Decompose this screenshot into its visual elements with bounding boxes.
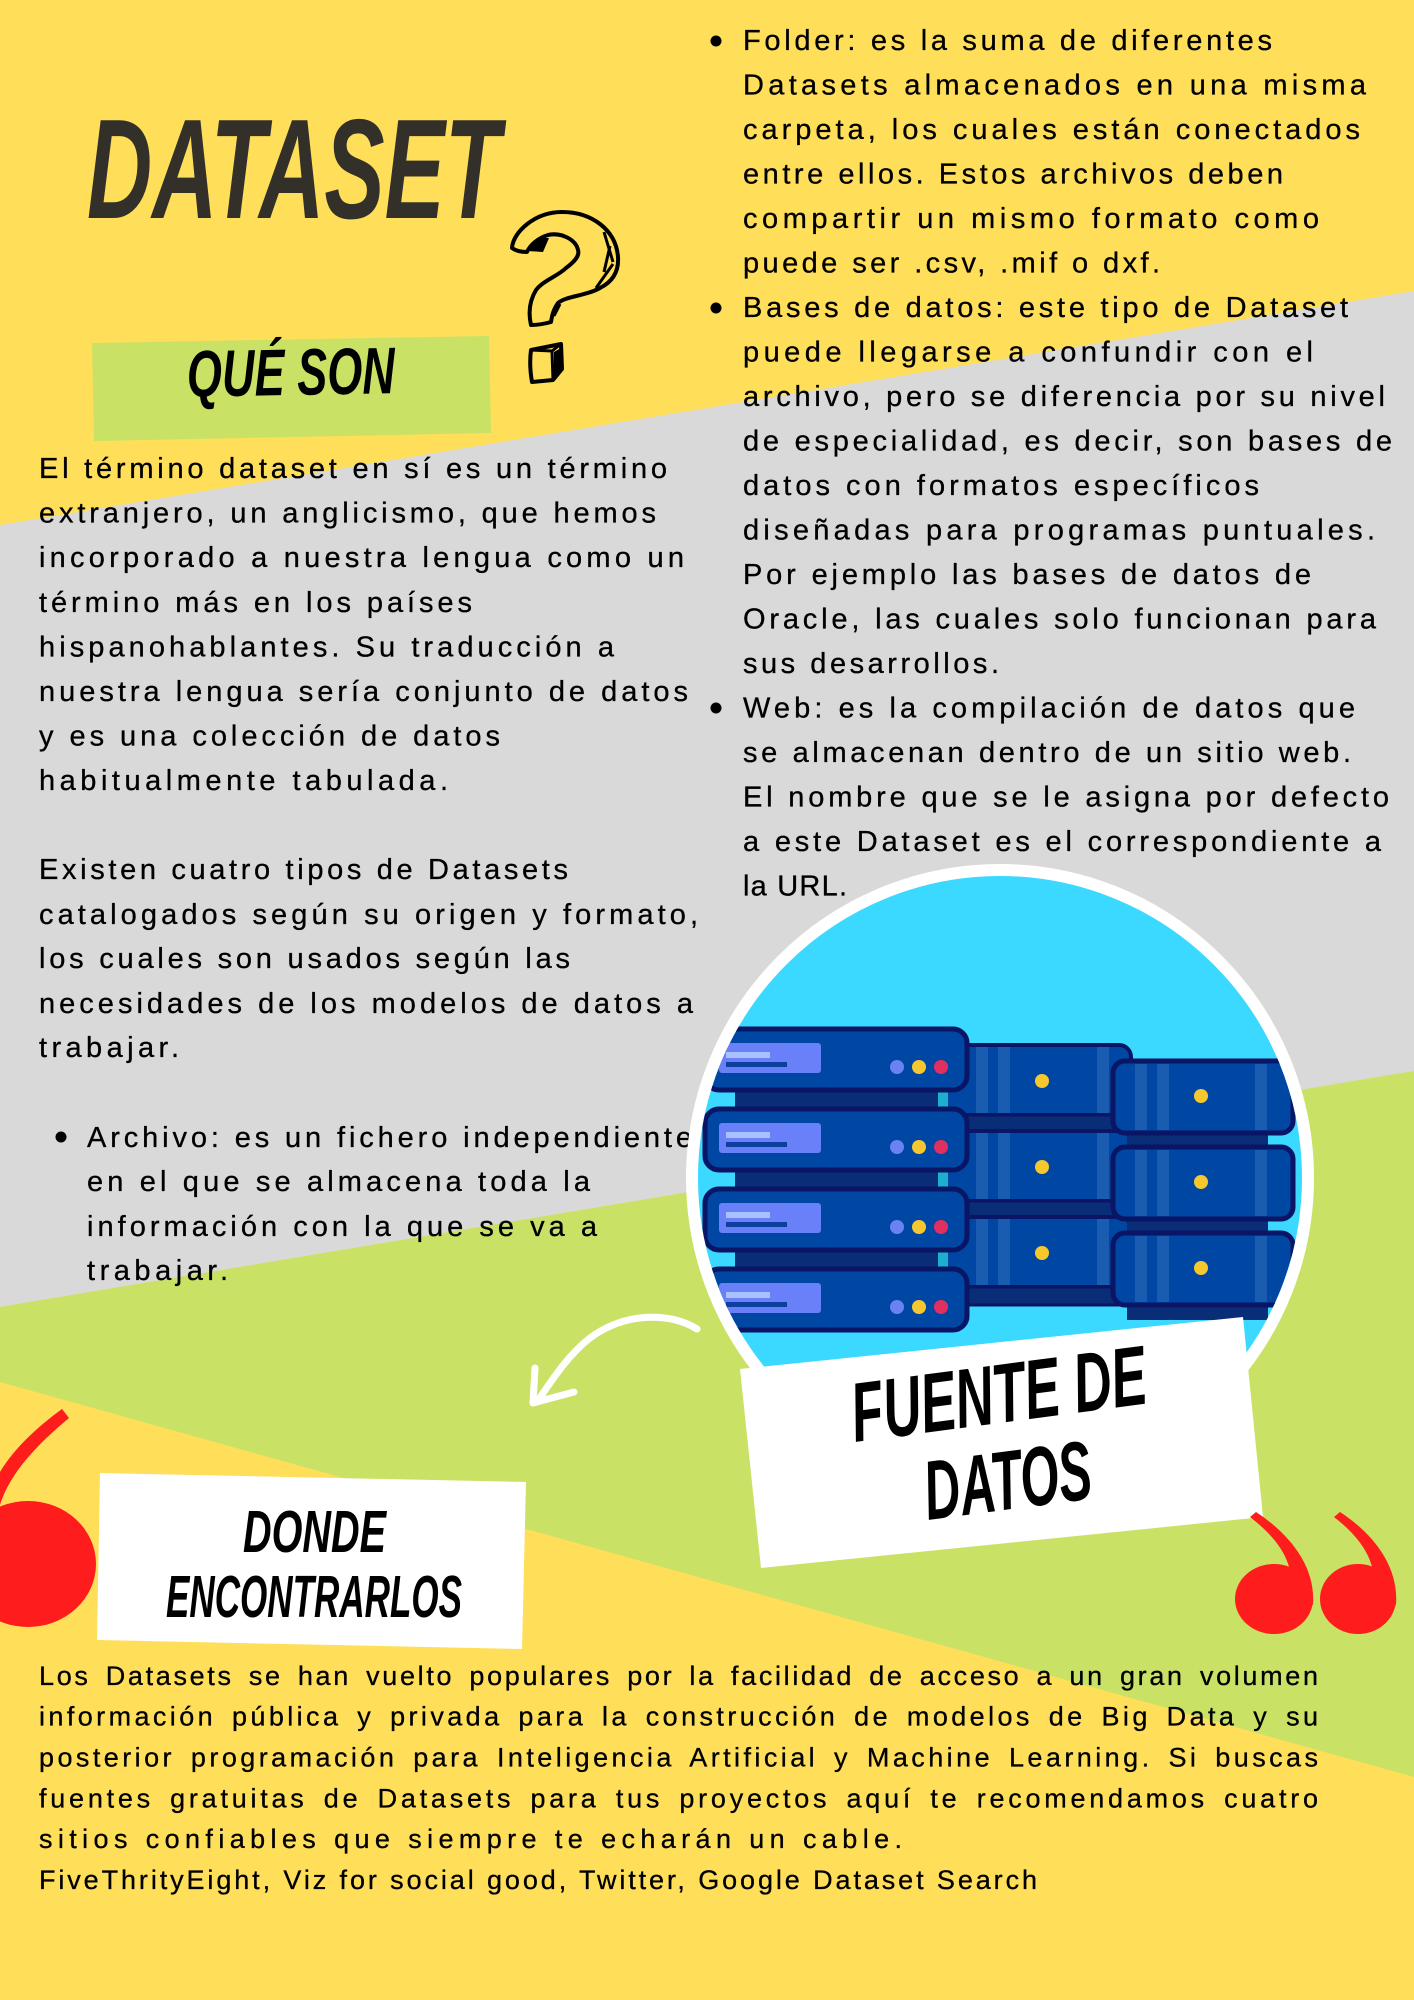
text block: definition: y es una colección de datos — [39, 721, 500, 753]
heading: qué son: QUÉ SON — [186, 333, 396, 411]
bullet: archivo: en el que se almacena toda la — [87, 1166, 591, 1198]
text block: definition: nuestra lengua sería conjunto de datos — [39, 676, 688, 708]
background band: gray — [0, 291, 1414, 1307]
text block: definition: habitualmente tabulada. — [39, 765, 448, 797]
text block: types intro: necesidades de los modelos de datos a — [39, 988, 694, 1020]
bullet: bases de datos: archivo, pero se diferencia por su nivel — [743, 381, 1385, 413]
bullet: folder: puede ser .csv, .mif o dxf. — [743, 248, 1160, 280]
bullet: bases de datos: Por ejemplo las bases de datos de — [743, 559, 1311, 591]
text block: where to find datasets — [39, 1661, 1318, 1895]
label: fuente de datos: FUENTE DE — [845, 1328, 1154, 1460]
bullet: folder: compartir un mismo formato como — [743, 203, 1319, 235]
label: donde encontrarlos: DONDE — [243, 1499, 387, 1565]
icon: opening quote — [0, 1409, 96, 1627]
arrow — [533, 1317, 697, 1403]
bullet: web: Web: es la compilación de datos que — [743, 692, 1355, 724]
text block: types intro: Existen cuatro tipos de Datasets — [39, 854, 568, 886]
text block: types intro: trabajar. — [39, 1032, 179, 1064]
text block: where to find datasets: Los Datasets se han vuelto populares por la facilidad de acceso a un gran volumen — [39, 1661, 1318, 1691]
text block: definition: incorporado a nuestra lengua como un — [39, 542, 684, 574]
bullet: web: la URL. — [743, 870, 847, 902]
label: donde encontrarlos: ENCONTRARLOS — [166, 1564, 462, 1630]
bullet: folder: carpeta, los cuales están conectados — [743, 114, 1360, 146]
icon: question mark — [512, 212, 618, 382]
text block: where to find datasets: información pública y privada para la construcción de modelos de Big Data y su — [39, 1702, 1318, 1732]
text block: definition — [39, 453, 688, 797]
bullet: bases de datos: datos con formatos específicos — [743, 470, 1259, 502]
bullet: bases de datos: de especialidad, es decir, son bases de — [743, 426, 1392, 458]
heading: qué son — [92, 333, 491, 441]
bullet: folder: entre ellos. Estos archivos deben — [743, 158, 1283, 190]
bullet: web — [710, 692, 1389, 902]
bullet: archivo: Archivo: es un fichero independiente — [87, 1122, 692, 1154]
text block: definition: El término dataset en sí es un término — [39, 453, 667, 485]
bullet: bases de datos — [710, 292, 1392, 680]
image: servers in circle — [686, 864, 1314, 1370]
bullet: archivo: información con la que se va a — [87, 1211, 598, 1243]
text block: where to find datasets: posterior programación para Inteligencia Artificial y Machine Learning. Si buscas — [39, 1742, 1318, 1772]
label: fuente de datos: DATOS — [918, 1423, 1097, 1538]
bullet: folder: Folder: es la suma de diferentes — [743, 25, 1272, 57]
text block: where to find datasets: fuentes gratuitas de Datasets para tus proyectos aquí te recomendamos cuatro — [39, 1784, 1318, 1814]
label: fuente de datos — [740, 1317, 1263, 1568]
bullet: bases de datos: Bases de datos: este tipo de Dataset — [743, 292, 1348, 324]
bullet: archivo — [56, 1122, 692, 1287]
bullet: bases de datos: Oracle, las cuales solo funcionan para — [743, 604, 1377, 636]
text block: types intro: los cuales son usados según las — [39, 943, 570, 975]
text block: where to find datasets: sitios confiables que siempre te echarán un cable. — [39, 1824, 902, 1854]
background band: green — [0, 1071, 1414, 1777]
bullet: bases de datos: puede llegarse a confundir con el — [743, 336, 1313, 368]
text block: definition: término más en los países — [39, 587, 472, 619]
text block: types intro — [39, 854, 698, 1064]
bullet: folder — [710, 25, 1367, 280]
text block: definition: extranjero, un anglicismo, que hemos — [39, 498, 656, 530]
bullet: bases de datos: sus desarrollos. — [743, 648, 999, 680]
bullet: folder: Datasets almacenados en una misma — [743, 70, 1367, 102]
bullet: web: se almacenan dentro de un sitio web. — [743, 737, 1351, 769]
text block: types intro: catalogados según su origen y formato, — [39, 899, 698, 931]
bullet: web: a este Dataset es el correspondiente a — [743, 826, 1382, 858]
bullet: web: El nombre que se le asigna por defecto — [743, 782, 1389, 814]
bullet: bases de datos: diseñadas para programas puntuales. — [743, 514, 1375, 546]
text block: definition: hispanohablantes. Su traducción a — [39, 631, 615, 663]
title: DATASET — [87, 90, 507, 249]
bullet: archivo: trabajar. — [87, 1255, 228, 1287]
text block: where to find datasets: FiveThrityEight, Viz for social good, Twitter, Google Dataset Search — [39, 1865, 1037, 1895]
icon: closing quote — [1235, 1512, 1396, 1634]
label: donde encontrarlos — [97, 1473, 526, 1649]
